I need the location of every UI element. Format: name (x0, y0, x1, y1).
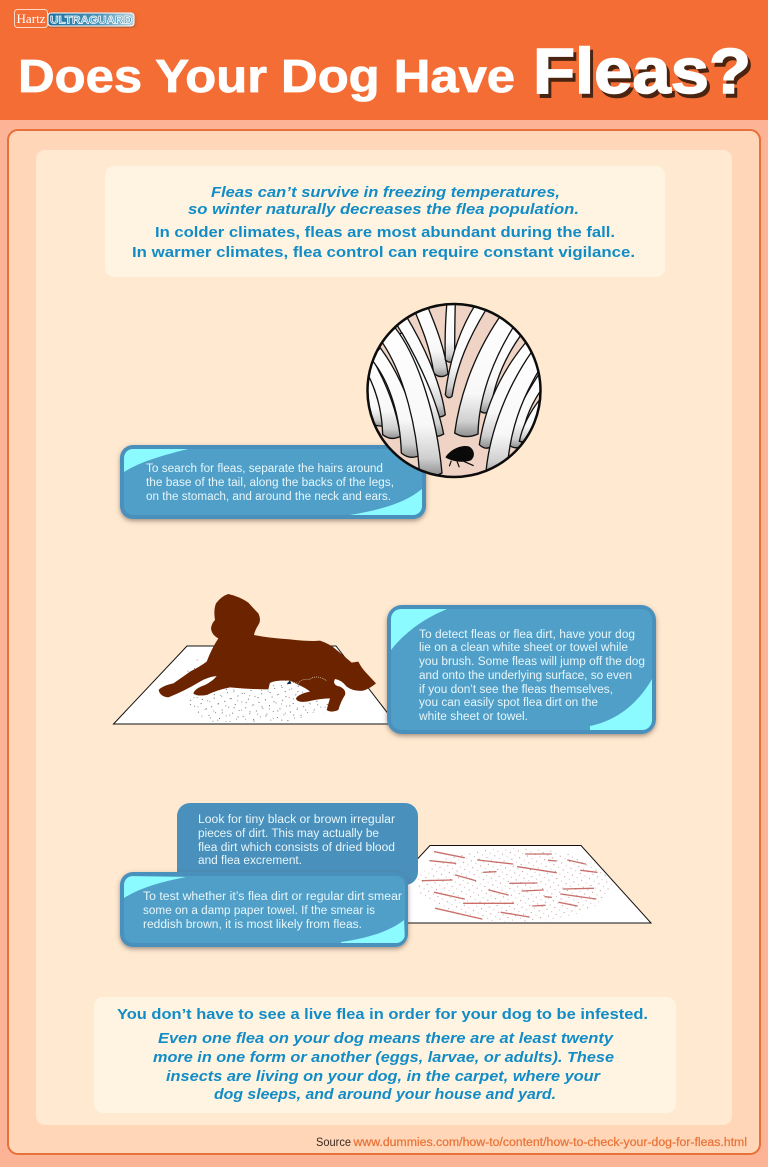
callout: look for dirt (177, 803, 418, 885)
illustration: magnified fur with flea (364, 301, 545, 477)
callout: look for dirt: Look for tiny black or brown irregular (198, 814, 395, 826)
callout: test flea dirt (120, 872, 408, 947)
icon: flea (445, 446, 474, 467)
callout: test flea dirt: reddish brown, it is most likely from fleas. (143, 919, 362, 931)
source line: Source (316, 1137, 351, 1149)
title (18, 35, 754, 111)
illustration: dog silhouette (159, 594, 376, 712)
title: Fleas? (536, 39, 754, 111)
callout: search for fleas (120, 445, 426, 519)
callout: test flea dirt: To test whether it’s flea dirt or regular dirt smear (143, 891, 402, 903)
callout: detect fleas: white sheet or towel. (418, 711, 528, 723)
callout: detect fleas: you can easily spot flea dirt on the (419, 697, 598, 709)
panel: closing text box: Even one flea on your dog means there are at least twenty (158, 1030, 614, 1047)
source line: www.dummies.com/how-to/content/how-to-check-your-dog-for-fleas.html (352, 1137, 747, 1149)
illustration: white towel with flea dirt (114, 646, 396, 724)
logo: Hartz UltraGuard: ULTRAGUARD (50, 14, 132, 26)
logo: Hartz UltraGuard: Hartz (16, 12, 46, 26)
callout: detect fleas: you brush. Some fleas will jump off the dog (419, 656, 645, 668)
callout: test flea dirt: some on a damp paper towel. If the smear is (143, 905, 375, 917)
title: Does Your Dog Have (18, 50, 515, 102)
illustration: towel with smears (358, 846, 651, 923)
title: Fleas? (533, 35, 751, 107)
panel: closing text box (94, 997, 676, 1113)
callout: look for dirt: pieces of dirt. This may actually be (198, 828, 379, 840)
panel: intro text box: Fleas can’t survive in freezing temperatures, (211, 184, 560, 201)
callout: detect fleas: lie on a clean white sheet or towel while (419, 642, 628, 654)
callout: search for fleas: To search for fleas, separate the hairs around (146, 463, 383, 475)
callout: detect fleas: and onto the underlying surface, so even (419, 670, 632, 682)
panel: closing text box: You don’t have to see a live flea in order for your dog to be infested. (117, 1006, 648, 1023)
panel: intro text box: In colder climates, fleas are most abundant during the fall. (155, 224, 615, 241)
callout: search for fleas: on the stomach, and around the neck and ears. (146, 491, 391, 503)
header band (0, 0, 768, 120)
callout: detect fleas: To detect fleas or flea dirt, have your dog (419, 629, 635, 641)
panel: closing text box: dog sleeps, and around your house and yard. (214, 1086, 556, 1103)
panel: intro text box: so winter naturally decreases the flea population. (188, 201, 579, 218)
panel: intro text box: In warmer climates, flea control can require constant vigilance. (132, 244, 635, 261)
logo: Hartz UltraGuard (14, 10, 134, 28)
callout: detect fleas (387, 605, 656, 734)
callout: look for dirt: and flea excrement. (198, 855, 302, 867)
callout: detect fleas: if you don’t see the fleas themselves, (419, 684, 613, 696)
callout: look for dirt: flea dirt which consists of dried blood (198, 842, 395, 854)
panel: intro text box (105, 166, 665, 277)
panel: closing text box: insects are living on your dog, in the carpet, where your (166, 1068, 601, 1085)
panel: inner card (36, 150, 732, 1125)
panel: closing text box: more in one form or another (eggs, larvae, or adults). These (153, 1049, 614, 1066)
callout: search for fleas: the base of the tail, along the backs of the legs, (146, 477, 394, 489)
